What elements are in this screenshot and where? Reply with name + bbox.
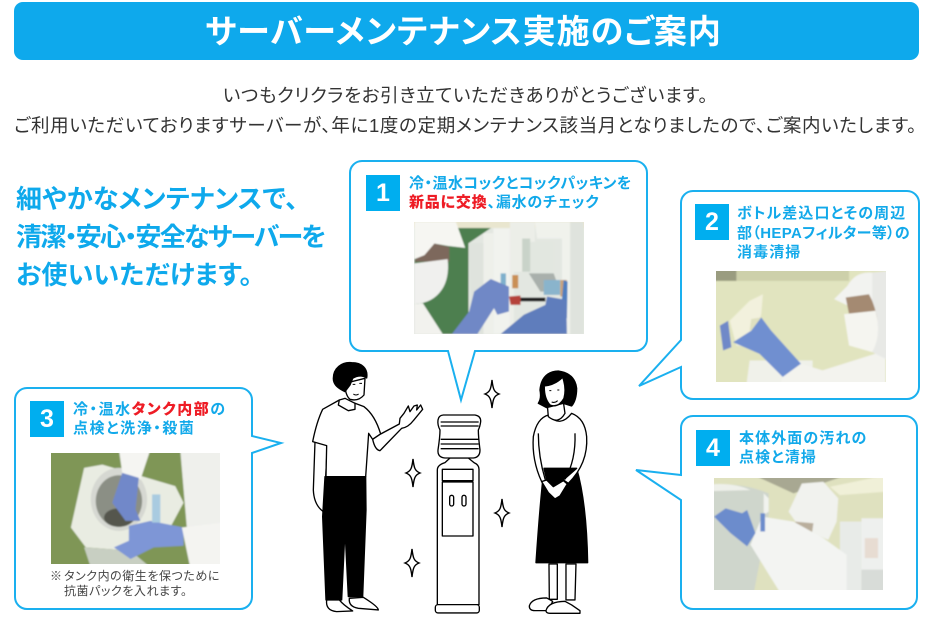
- number 3: 3: [40, 405, 54, 433]
- title banner: [14, 2, 919, 60]
- lead heading: 清潔・安心・安全なサーバーを: [16, 222, 324, 252]
- illustration: woman: [529, 371, 588, 613]
- illustration: man: [313, 363, 423, 612]
- icon: sparkle: [405, 549, 419, 577]
- photo: disinfecting part: [716, 271, 886, 382]
- intro text: ご利用いただいておりますサーバーが、年に1度の定期メンテナンス該当月となりましたので、ご案内いたします。: [14, 115, 917, 136]
- photo: cleaning tank: [51, 453, 220, 564]
- number 4: [696, 430, 730, 466]
- photo: wiping server: [714, 478, 883, 590]
- panel 3 note: [50, 569, 220, 598]
- illustration: water server: [435, 415, 481, 613]
- icon: sparkle: [406, 459, 420, 487]
- panel 1 text: 冷・温水コックとコックパッキンを: [409, 175, 632, 192]
- intro text: [14, 85, 917, 136]
- panel 1: cock replacement: [349, 160, 648, 404]
- number 4: 4: [706, 434, 720, 462]
- panel 4: exterior cleaning: [636, 415, 918, 610]
- illustration: people and water server: [312, 362, 588, 614]
- lead heading: お使いいただけます。: [16, 260, 253, 290]
- photo: replacing cock: [414, 222, 584, 334]
- panel 2 text: ボトル差込口とその周辺: [737, 205, 906, 222]
- panel 1 text: [409, 175, 632, 210]
- icon: sparkle: [495, 499, 509, 527]
- panel 3 note: タンク内の衛生を保つために: [64, 569, 220, 583]
- number 1: [366, 175, 400, 211]
- panel 1 text: 新品に交換、漏水のチェック: [409, 194, 600, 210]
- panel 4 text: 本体外面の汚れの: [739, 430, 867, 447]
- panel 2 text: [737, 205, 910, 261]
- panel 3 text: [73, 401, 227, 437]
- lead heading: 細やかなメンテナンスで、: [16, 184, 298, 214]
- lead heading: [16, 184, 324, 290]
- panel 3 text: 冷・温水タンク内部の: [73, 401, 227, 418]
- number 2: 2: [705, 208, 719, 236]
- panel 4 text: [739, 430, 867, 466]
- panel 2 text: 部（HEPAフィルター等）の: [737, 224, 910, 242]
- panel 3: tank cleaning: [14, 387, 284, 610]
- panel 2: bottle inlet: [638, 190, 920, 400]
- panel 2 text: 消毒清掃: [737, 244, 801, 261]
- number 1: 1: [376, 179, 390, 207]
- title banner: サーバーメンテナンス実施のご案内: [205, 13, 722, 50]
- panel 3 note: 抗菌パックを入れます。: [64, 584, 187, 598]
- icon: sparkle: [485, 380, 499, 408]
- panel 3 note: ※: [50, 569, 63, 583]
- panel 3 text: 点検と洗浄・殺菌: [73, 420, 195, 437]
- panel 4 text: 点検と清掃: [739, 449, 817, 466]
- intro text: いつもクリクラをお引き立ていただきありがとうございます。: [223, 85, 708, 106]
- number 2: [695, 204, 729, 240]
- number 3: [30, 401, 64, 437]
